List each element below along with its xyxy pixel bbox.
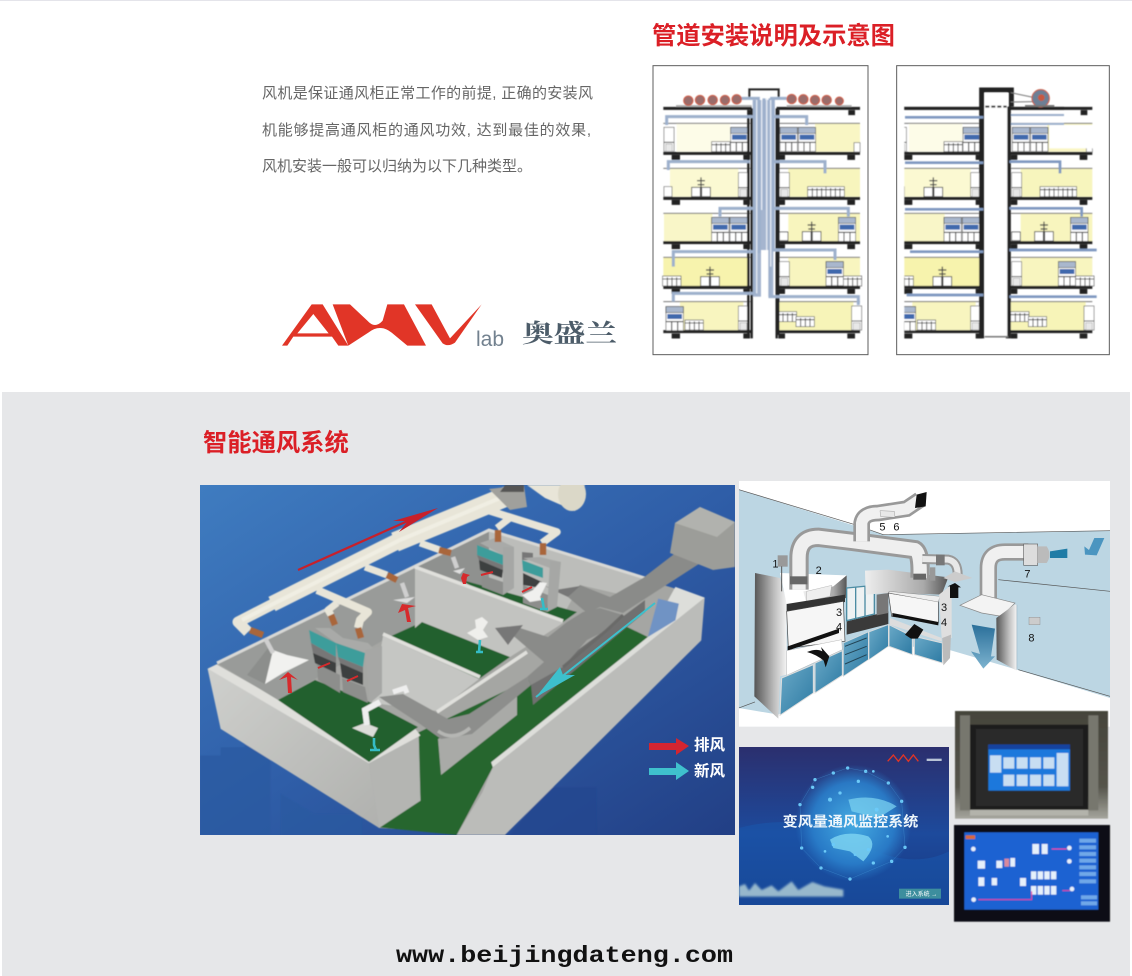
text block: fan installation intro: 风机是保证通风柜正常工作的前提, 正确的安装风 [262, 85, 593, 102]
number labels: 4 [836, 622, 842, 634]
partition walls [372, 567, 563, 775]
legend labels: 新风 [694, 761, 726, 780]
illustration: fume hood ventilation schematic [739, 481, 1110, 727]
left fume hood [754, 573, 847, 719]
room back walls [217, 530, 645, 700]
enter button [899, 889, 941, 899]
fume hoods: far room [477, 538, 561, 612]
text block: fan installation intro [262, 85, 593, 175]
photo: VAV system flow screen [954, 825, 1110, 922]
number labels: 8 [1028, 633, 1034, 645]
exhaust fan [488, 485, 587, 512]
logo: AMV lab [282, 304, 617, 351]
photo: wall touch panel [955, 711, 1108, 819]
text block: fan installation intro: 风机安装一般可以归纳为以下几种类型。 [262, 158, 532, 175]
diagram: duct layout with shared shaft fan [895, 66, 1109, 355]
number labels [772, 522, 1034, 645]
legend labels: 排风 [694, 736, 726, 754]
number labels: 3 [941, 602, 947, 614]
dampers and fans [778, 511, 1067, 671]
number labels: 3 [836, 607, 842, 619]
website URL: www.beijingdateng.com [396, 943, 733, 970]
icon: roof fans [676, 94, 852, 106]
number labels: 6 [893, 522, 899, 534]
text block: fan installation intro: 机能够提高通风柜的通风功效, 达到最佳的效果, [262, 122, 591, 139]
room floors [278, 580, 577, 762]
supply ducts [379, 548, 705, 739]
arrows: airflow [807, 492, 961, 667]
diagram: duct layout with roof fans [653, 66, 868, 355]
arrows: small exhaust [279, 572, 532, 693]
fresh air diffusers [352, 585, 580, 737]
globe [795, 765, 912, 881]
ducts [799, 500, 1028, 603]
logo: AMV lab: 奥盛兰 [522, 319, 617, 348]
enter button: 进入系统 → [906, 890, 937, 898]
exhaust pipes [238, 495, 557, 632]
heading: smart ventilation system: 智能通风系统 [203, 430, 349, 457]
number labels: 2 [816, 565, 822, 577]
number labels: 5 [879, 522, 885, 534]
number labels: 4 [941, 617, 947, 629]
logo: AMV lab: lab [476, 328, 504, 351]
panel: grey lower section [2, 392, 1130, 976]
walls [739, 490, 1110, 715]
small logo [888, 755, 942, 761]
icon: roof blower fan [1011, 90, 1054, 107]
fume hoods: first room [309, 628, 382, 703]
legend arrows [649, 738, 689, 780]
screen: VAV monitoring system splash [739, 747, 949, 905]
legend labels [694, 736, 726, 780]
illustration: 3D ventilation model [200, 477, 735, 835]
outer walls and corridor floor [200, 584, 706, 835]
right fume hood [865, 570, 952, 665]
dampers [250, 530, 543, 638]
heading: duct installation: 管道安装说明及示意图 [652, 22, 895, 50]
arrows: blue air [971, 538, 1104, 669]
arrows: small fresh air [370, 598, 548, 750]
number labels: 7 [1024, 569, 1030, 581]
hood canopy [247, 568, 465, 684]
arrow: exhaust flow [298, 508, 438, 570]
arrow: fresh air flow [536, 603, 655, 697]
system name: 变风量通风监控系统 [783, 814, 918, 830]
supply box [670, 507, 735, 570]
number labels: 1 [772, 558, 778, 570]
middle cabinets and shelf [843, 585, 888, 676]
skyline [739, 881, 843, 897]
